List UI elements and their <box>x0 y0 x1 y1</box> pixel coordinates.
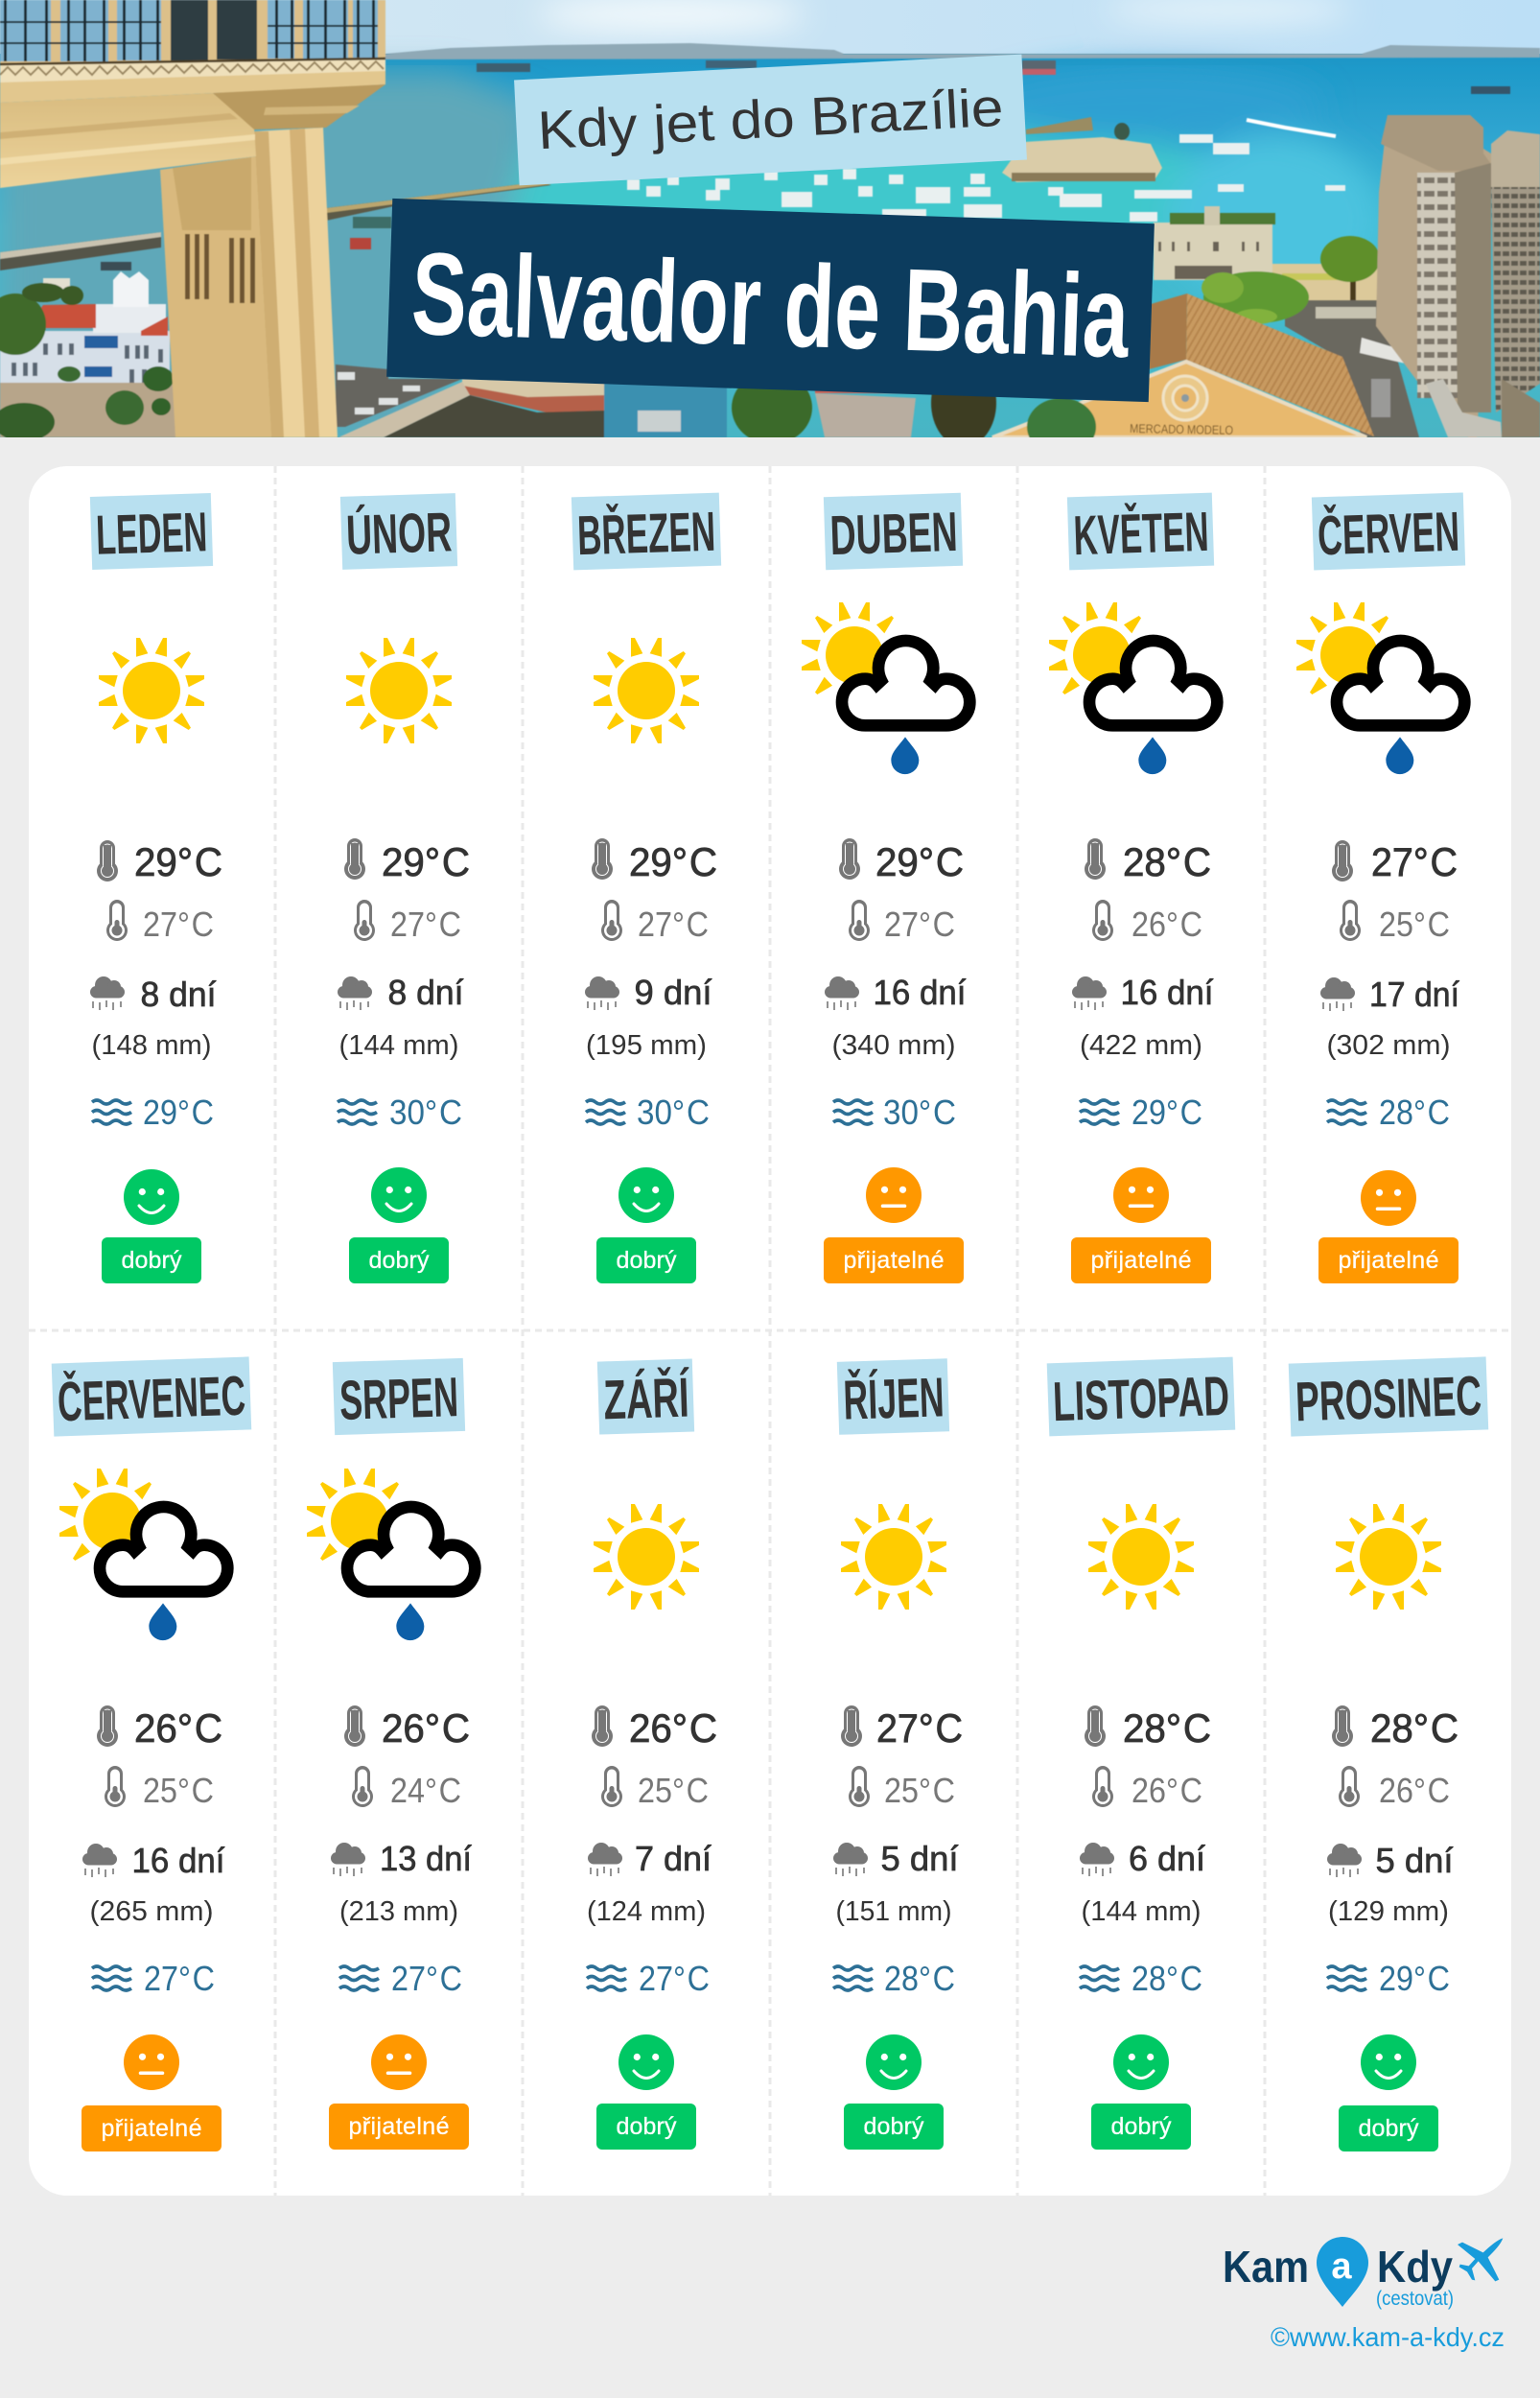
sea temperature <box>1080 1959 1202 1998</box>
month label <box>340 493 457 570</box>
column: LEDEN <box>90 493 222 1283</box>
low temperature <box>849 1766 955 1810</box>
right city: cream building <box>1154 223 1272 280</box>
month label <box>1067 493 1214 570</box>
high temperature: 26°C <box>382 1705 470 1751</box>
icon: sun <box>594 1504 699 1610</box>
high temperature: 29°C <box>134 839 222 884</box>
rain days <box>338 973 464 1012</box>
sea temperature <box>833 1959 955 1998</box>
column: ZÁŘÍ <box>587 1358 717 2150</box>
low temperature: 26°C <box>1379 1771 1450 1810</box>
rainfall: (302 mm) <box>1327 1030 1450 1061</box>
low temperature: 27°C <box>884 905 955 944</box>
rating badge <box>824 1237 964 1283</box>
subtitle banner <box>514 55 1027 185</box>
dock <box>336 364 462 427</box>
rating badge <box>82 2105 222 2151</box>
low temperature: 27°C <box>143 905 214 944</box>
sea temperature <box>92 1093 214 1132</box>
sea temperature <box>339 1959 462 1998</box>
rating badge <box>1318 1237 1458 1283</box>
sea temperature: 29°C <box>1379 1959 1450 1998</box>
column: ČERVENEC <box>52 1356 251 2151</box>
column: ÚNOR <box>338 493 470 1283</box>
month label <box>52 1356 251 1437</box>
rating badge: přijatelné <box>1339 1247 1438 1274</box>
header photo: Salvador bay <box>0 0 1540 456</box>
column: DUBEN <box>802 493 969 1283</box>
rain days <box>1080 1839 1205 1878</box>
month label: KVĚTEN <box>1073 501 1210 567</box>
rating badge: dobrý <box>616 1247 677 1274</box>
icon: sun <box>346 638 452 743</box>
towers <box>1376 115 1491 441</box>
month label: ČERVENEC <box>57 1365 246 1433</box>
low temperature <box>1092 900 1202 944</box>
rain days: 8 dní <box>140 975 217 1014</box>
high temperature <box>1332 1705 1458 1751</box>
icon: sun <box>1088 1504 1194 1610</box>
low temperature: 27°C <box>638 905 709 944</box>
rainfall: (340 mm) <box>832 1030 955 1061</box>
high temperature: 26°C <box>629 1705 717 1751</box>
rating badge <box>596 1237 696 1283</box>
rating badge: přijatelné <box>102 2115 201 2142</box>
low temperature <box>1340 900 1450 944</box>
rating badge <box>1071 1237 1211 1283</box>
high temperature: 27°C <box>876 1705 963 1751</box>
sea temperature: 30°C <box>389 1093 462 1132</box>
rating badge: dobrý <box>863 2113 924 2140</box>
low temperature: 25°C <box>884 1771 955 1810</box>
high temperature <box>97 1705 222 1751</box>
low temperature: 25°C <box>143 1771 214 1810</box>
high temperature <box>344 838 470 884</box>
rain days: 6 dní <box>1129 1839 1205 1878</box>
rating face <box>618 2034 674 2090</box>
low temperature: 26°C <box>1132 905 1202 944</box>
low temperature <box>1339 1766 1450 1810</box>
rating face <box>1361 1170 1416 1226</box>
month label <box>824 493 963 570</box>
rain days <box>90 975 217 1014</box>
sea temperature: 27°C <box>144 1959 215 1998</box>
rain days: 16 dní <box>1120 973 1214 1012</box>
low temperature: 25°C <box>1379 905 1450 944</box>
rain days: 17 dní <box>1369 975 1459 1014</box>
sea temperature: 30°C <box>637 1093 710 1132</box>
rain days <box>833 1839 959 1878</box>
icon: sun behind cloud with drop <box>802 602 969 774</box>
rain days: 7 dní <box>635 1839 712 1878</box>
rating badge: dobrý <box>1110 2113 1172 2140</box>
sea temperature <box>1327 1959 1450 1998</box>
month label: ŘÍJEN <box>843 1366 945 1432</box>
green trees <box>1203 271 1309 323</box>
rating face <box>1113 1167 1169 1223</box>
rain days <box>588 1839 712 1878</box>
month label: ÚNOR <box>345 501 453 567</box>
rainfall: (129 mm) <box>1328 1896 1449 1927</box>
market hall <box>1149 294 1187 369</box>
sea temperature: 27°C <box>639 1959 710 1998</box>
rating badge <box>1091 2104 1191 2150</box>
month label <box>333 1358 465 1435</box>
logo: Kam a Kdy: Kam <box>1223 2242 1309 2292</box>
subtitle banner: Kdy jet do Brazílie <box>536 77 1005 160</box>
high temperature: 28°C <box>1123 839 1211 884</box>
rain days <box>1327 1841 1454 1880</box>
month label <box>1312 493 1465 570</box>
icon: sun <box>1336 1504 1441 1610</box>
column: KVĚTEN <box>1049 493 1217 1283</box>
month label: BŘEZEN <box>576 501 716 567</box>
rain days <box>1320 975 1459 1014</box>
sea temperature <box>338 1093 462 1132</box>
icon: sun <box>841 1504 946 1610</box>
column: ČERVEN <box>1296 493 1465 1283</box>
low temperature: 25°C <box>638 1771 709 1810</box>
rating face <box>866 1167 922 1223</box>
low temperature <box>849 900 955 944</box>
rating badge <box>596 2104 696 2150</box>
rainfall: (195 mm) <box>586 1030 707 1061</box>
column: BŘEZEN <box>572 493 721 1283</box>
rating face <box>124 2034 179 2090</box>
rating badge <box>1339 2105 1438 2151</box>
high temperature: 29°C <box>629 839 717 884</box>
title banner: Salvador de Bahia <box>409 228 1132 382</box>
low temperature: 24°C <box>390 1771 461 1810</box>
rainfall: (151 mm) <box>836 1896 951 1927</box>
high temperature <box>839 838 964 884</box>
rain days <box>1072 973 1214 1012</box>
rating face <box>866 2034 922 2090</box>
rainfall: (144 mm) <box>338 1030 459 1061</box>
high temperature: 28°C <box>1123 1705 1211 1751</box>
high temperature <box>1332 839 1458 884</box>
tree <box>1350 280 1356 301</box>
sea temperature <box>586 1093 710 1132</box>
sand and road <box>1272 264 1378 300</box>
rainfall: (213 mm) <box>339 1896 458 1927</box>
sea temperature: 28°C <box>1132 1959 1202 1998</box>
logo: Kam a Kdy: (cestovat) <box>1376 2288 1454 2310</box>
panel: climate table card <box>29 466 1511 2196</box>
high temperature <box>1085 838 1211 884</box>
sea temperature <box>92 1959 215 1998</box>
rain days: 16 dní <box>132 1841 224 1880</box>
high temperature <box>97 839 222 884</box>
rating face <box>124 1169 179 1225</box>
icon: sun behind cloud with drop <box>59 1469 227 1640</box>
low temperature: 27°C <box>390 905 461 944</box>
month label <box>837 1358 949 1435</box>
rain days <box>585 973 712 1012</box>
month label <box>597 1358 694 1435</box>
column: PROSINEC <box>1289 1356 1488 2151</box>
low temperature <box>352 1766 461 1810</box>
rating badge: dobrý <box>121 1247 182 1274</box>
rain days: 8 dní <box>387 973 464 1012</box>
month label <box>572 493 721 570</box>
sea temperature: 29°C <box>143 1093 214 1132</box>
rating face <box>618 1167 674 1223</box>
low temperature <box>601 900 709 944</box>
rainfall: (124 mm) <box>587 1896 706 1927</box>
sea temperature <box>1327 1093 1450 1132</box>
rainfall: (422 mm) <box>1080 1030 1202 1061</box>
rating face <box>371 2034 427 2090</box>
rain days: 9 dní <box>635 973 712 1012</box>
logo: Kam a Kdy: a <box>1331 2246 1352 2287</box>
high temperature: 28°C <box>1370 1705 1458 1751</box>
rain days <box>82 1841 224 1880</box>
left sea details <box>0 232 161 270</box>
rainfall: (148 mm) <box>91 1030 212 1061</box>
month label: LISTOPAD <box>1052 1365 1230 1433</box>
high temperature <box>592 1705 717 1751</box>
rating face <box>1361 2034 1416 2090</box>
column: LISTOPAD <box>1047 1357 1235 2150</box>
rating badge <box>349 1237 449 1283</box>
rating badge: přijatelné <box>844 1247 944 1274</box>
header photo: Salvador bay: MERCADO MODELO <box>1130 421 1233 437</box>
sea temperature: 29°C <box>1132 1093 1202 1132</box>
column: SRPEN <box>307 1358 475 2150</box>
icon: sun <box>594 638 699 743</box>
sea temperature: 27°C <box>391 1959 462 1998</box>
rain days: 16 dní <box>873 973 967 1012</box>
low temperature <box>105 1766 214 1810</box>
rating badge <box>844 2104 944 2150</box>
rating badge <box>102 1237 201 1283</box>
high temperature: 27°C <box>1371 839 1458 884</box>
month label: SRPEN <box>338 1366 459 1432</box>
column: ŘÍJEN <box>833 1358 963 2150</box>
logo: Kam a Kdy <box>1223 2237 1503 2310</box>
rating badge: dobrý <box>616 2113 677 2140</box>
title banner <box>386 199 1155 402</box>
rainfall: (144 mm) <box>1081 1896 1202 1927</box>
high temperature: 29°C <box>382 839 470 884</box>
icon: sun behind cloud with drop <box>1049 602 1217 774</box>
high temperature <box>592 838 717 884</box>
high temperature <box>841 1705 963 1751</box>
rating badge: přijatelné <box>349 2113 449 2140</box>
month label <box>90 493 213 570</box>
rain days: 13 dní <box>380 1839 472 1878</box>
low temperature <box>1092 1766 1202 1810</box>
website credit: ©www.kam-a-kdy.cz <box>1271 2322 1505 2352</box>
rating badge: dobrý <box>1358 2115 1419 2142</box>
high temperature: 26°C <box>134 1705 222 1751</box>
sea temperature: 30°C <box>883 1093 956 1132</box>
rain days: 5 dní <box>1375 1841 1454 1880</box>
icon: sun behind cloud with drop <box>307 1469 475 1640</box>
rain days <box>825 973 967 1012</box>
rain days <box>331 1839 472 1878</box>
high temperature <box>344 1705 470 1751</box>
sea temperature <box>1080 1093 1202 1132</box>
left lower scene <box>0 382 182 437</box>
elevator tower <box>160 156 278 437</box>
low temperature <box>354 900 461 944</box>
rating badge: přijatelné <box>1091 1247 1191 1274</box>
rating badge <box>329 2104 469 2150</box>
high temperature: 29°C <box>875 839 964 884</box>
sea temperature: 28°C <box>884 1959 955 1998</box>
rating face <box>1113 2034 1169 2090</box>
sea temperature: 28°C <box>1379 1093 1450 1132</box>
rainfall: (265 mm) <box>90 1896 213 1927</box>
high temperature <box>1085 1705 1211 1751</box>
ships <box>477 63 530 72</box>
month label: ZÁŘÍ <box>603 1367 691 1431</box>
month label: DUBEN <box>829 501 959 567</box>
rating badge: dobrý <box>368 1247 430 1274</box>
rain days: 5 dní <box>880 1839 959 1878</box>
icon: sun <box>99 638 204 743</box>
low temperature <box>601 1766 709 1810</box>
low temperature <box>106 900 214 944</box>
icon: sun behind cloud with drop <box>1296 602 1464 774</box>
month label: LEDEN <box>95 501 208 567</box>
month label <box>1047 1357 1235 1436</box>
sea temperature <box>587 1959 710 1998</box>
logo: Kam a Kdy: Kdy <box>1377 2242 1453 2292</box>
rating face <box>371 1167 427 1223</box>
sea temperature <box>833 1093 956 1132</box>
low temperature: 26°C <box>1132 1771 1202 1810</box>
